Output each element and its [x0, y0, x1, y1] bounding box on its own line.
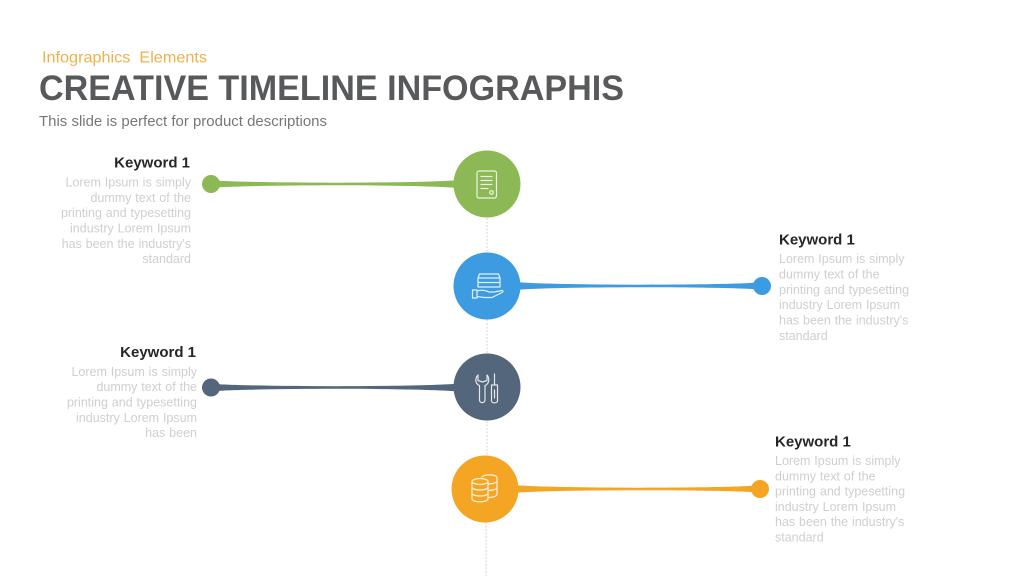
subtitle: This slide is perfect for product descriptions	[39, 114, 327, 130]
text block: keyword right 1: dummy text of the	[779, 268, 880, 282]
text block: keyword left 2: industry Lorem Ipsum	[76, 411, 197, 425]
connector: green	[202, 175, 460, 193]
text block: keyword left 1: Lorem Ipsum is simply	[65, 176, 192, 190]
text block: keyword right 1	[779, 232, 909, 343]
connector: blue	[515, 277, 771, 295]
text block: keyword left 1: printing and typesetting	[61, 206, 191, 220]
text block: keyword right 2	[775, 434, 905, 544]
text block: keyword left 2: has been	[145, 426, 197, 440]
text block: keyword left 1: industry Lorem Ipsum	[70, 222, 191, 236]
node: orange with database icon	[452, 456, 518, 522]
text block: keyword right 1: Keyword 1	[779, 232, 855, 248]
node: slate with tools icon	[454, 354, 520, 420]
connector: slate	[202, 378, 460, 396]
text block: keyword right 2: standard	[775, 530, 824, 544]
title: CREATIVE TIMELINE INFOGRAPHIS	[39, 69, 624, 108]
text block: keyword right 1: Lorem Ipsum is simply	[779, 252, 905, 266]
text block: keyword left 2: Lorem Ipsum is simply	[71, 365, 198, 379]
text block: keyword left 2: dummy text of the	[96, 380, 197, 394]
node: blue with hand and stack icon	[454, 252, 520, 320]
vertical timeline line	[486, 218, 487, 576]
text block: keyword right 2: printing and typesetting	[775, 484, 905, 498]
text block: keyword right 2: industry Lorem Ipsum	[775, 500, 896, 514]
eyebrow heading: Infographics Elements	[42, 50, 207, 66]
text block: keyword left 1: has been the industry's	[62, 237, 191, 251]
icon: wrench and screwdriver	[476, 374, 498, 403]
connector: orange	[513, 480, 769, 498]
text block: keyword left 1: dummy text of the	[90, 191, 191, 205]
text block: keyword right 2: has been the industry's	[775, 515, 904, 529]
text block: keyword left 2	[67, 344, 198, 440]
icon: database stacks	[472, 475, 497, 502]
text block: keyword right 2: Keyword 1	[775, 434, 851, 450]
text block: keyword left 2: printing and typesetting	[67, 396, 197, 410]
text block: keyword right 1: has been the industry's	[779, 314, 908, 328]
text block: keyword right 1: industry Lorem Ipsum	[779, 298, 900, 312]
text block: keyword left 1: standard	[142, 252, 191, 266]
node: green with document icon	[454, 150, 520, 218]
icon: hand holding stack	[472, 274, 503, 298]
text block: keyword right 2: dummy text of the	[775, 470, 876, 484]
text block: keyword left 1: Keyword 1	[114, 154, 190, 172]
text block: keyword right 1: printing and typesetting	[779, 283, 909, 297]
text block: keyword left 1	[61, 154, 192, 266]
text block: keyword right 1: standard	[779, 329, 828, 343]
text block: keyword left 2: Keyword 1	[120, 344, 196, 361]
text block: keyword right 2: Lorem Ipsum is simply	[775, 454, 901, 468]
icon: document	[477, 171, 496, 198]
